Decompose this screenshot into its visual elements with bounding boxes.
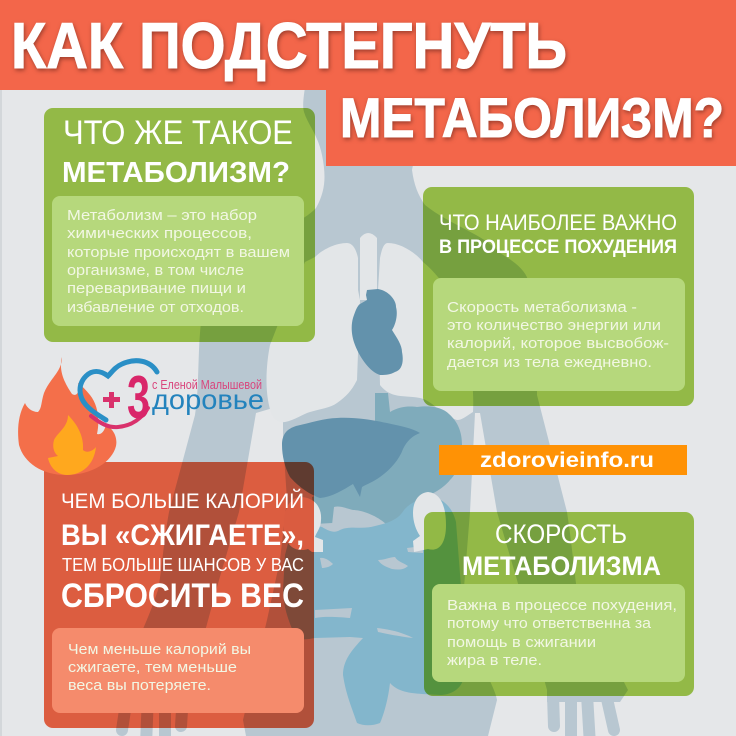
logo: numeral 3: 3	[127, 364, 150, 431]
text block: metabolism definition: химических процессов,	[67, 225, 252, 242]
logo: wordmark: доровье	[152, 384, 264, 415]
kidneys	[284, 492, 446, 552]
text block: fat burning: потому что ответственна за	[447, 615, 652, 632]
heading: most important: В ПРОЦЕССЕ ПОХУДЕНИЯ	[439, 237, 677, 258]
icon: heart outline	[80, 361, 157, 427]
heading: burn more calories: ВЫ «СЖИГАЕТЕ»,	[61, 519, 304, 552]
text block: burn fewer calories: Чем меньше калорий вы	[68, 641, 251, 658]
title line one: КАК ПОДСТЕГНУТЬ	[11, 9, 567, 82]
heading: metabolic rate	[462, 519, 661, 581]
icon: flame	[18, 357, 116, 475]
logo: Zdorovye with Elena Malysheva	[80, 361, 264, 431]
text block: metabolic rate: Скорость метаболизма -	[447, 299, 637, 316]
liver	[282, 418, 420, 498]
text block: metabolic rate: дается из тела ежедневно.	[447, 354, 652, 371]
text block: burn fewer calories: веса вы потеряете.	[68, 677, 211, 694]
panel: calories burned	[44, 462, 314, 728]
text block: metabolic rate: калорий, которое высвобож-	[447, 335, 669, 352]
text block: burn fewer calories: сжигаете, тем меньше	[68, 659, 237, 676]
text block: metabolism definition: Метаболизм – это набор	[67, 207, 257, 224]
lungs	[266, 233, 473, 422]
heading: metabolic rate: МЕТАБОЛИЗМА	[462, 551, 661, 581]
heading: what is metabolism	[62, 114, 293, 189]
text block: fat burning	[432, 584, 685, 682]
logo: subtitle: с Еленой Малышевой	[152, 378, 262, 392]
website banner	[439, 445, 687, 475]
panel: most important in weight loss	[423, 187, 694, 406]
heading: burn more calories	[61, 489, 304, 615]
heading: most important: ЧТО НАИБОЛЕЕ ВАЖНО	[439, 210, 677, 235]
text block: metabolism definition: организме, в том числе	[67, 262, 244, 279]
text block: metabolism definition	[52, 196, 304, 326]
text block: metabolic rate	[433, 278, 685, 391]
stomach	[312, 393, 462, 526]
heading: what is metabolism: ЧТО ЖЕ ТАКОЕ	[63, 114, 293, 152]
heading: most important	[439, 210, 677, 258]
heading: burn more calories: ТЕМ БОЛЬШЕ ШАНСОВ У ВАС	[62, 555, 304, 575]
stomach gap	[332, 506, 387, 527]
heading: burn more calories: СБРОСИТЬ ВЕС	[61, 577, 304, 615]
text block: fat burning: жира в теле.	[447, 652, 542, 669]
text block: fat burning: Важна в процессе похудения,	[447, 597, 677, 614]
icon: medical plus	[103, 392, 120, 408]
body silhouette with organs	[116, 60, 628, 736]
panel: what is metabolism	[44, 108, 315, 342]
text block: metabolism definition: которые происходят в вашем	[67, 244, 290, 261]
heading: what is metabolism: МЕТАБОЛИЗМ?	[62, 157, 290, 189]
text block: metabolism definition: переваривание пищи и	[67, 280, 246, 297]
text block: metabolic rate: это количество энергии или	[447, 317, 661, 334]
text block: burn fewer calories	[52, 628, 304, 713]
torso and arms	[116, 60, 628, 736]
text block: metabolism definition: избавление от отходов.	[67, 299, 244, 316]
heading: metabolic rate: СКОРОСТЬ	[495, 519, 627, 549]
website banner: zdorovieinfo.ru	[480, 449, 654, 472]
panel: metabolic rate	[424, 512, 694, 696]
heart	[352, 289, 403, 375]
text block: fat burning: помощь в сжигании	[447, 634, 596, 651]
title banner	[0, 0, 736, 166]
heading: burn more calories: ЧЕМ БОЛЬШЕ КАЛОРИЙ	[61, 489, 304, 513]
intestines	[283, 497, 463, 725]
intestine gaps	[315, 546, 423, 638]
